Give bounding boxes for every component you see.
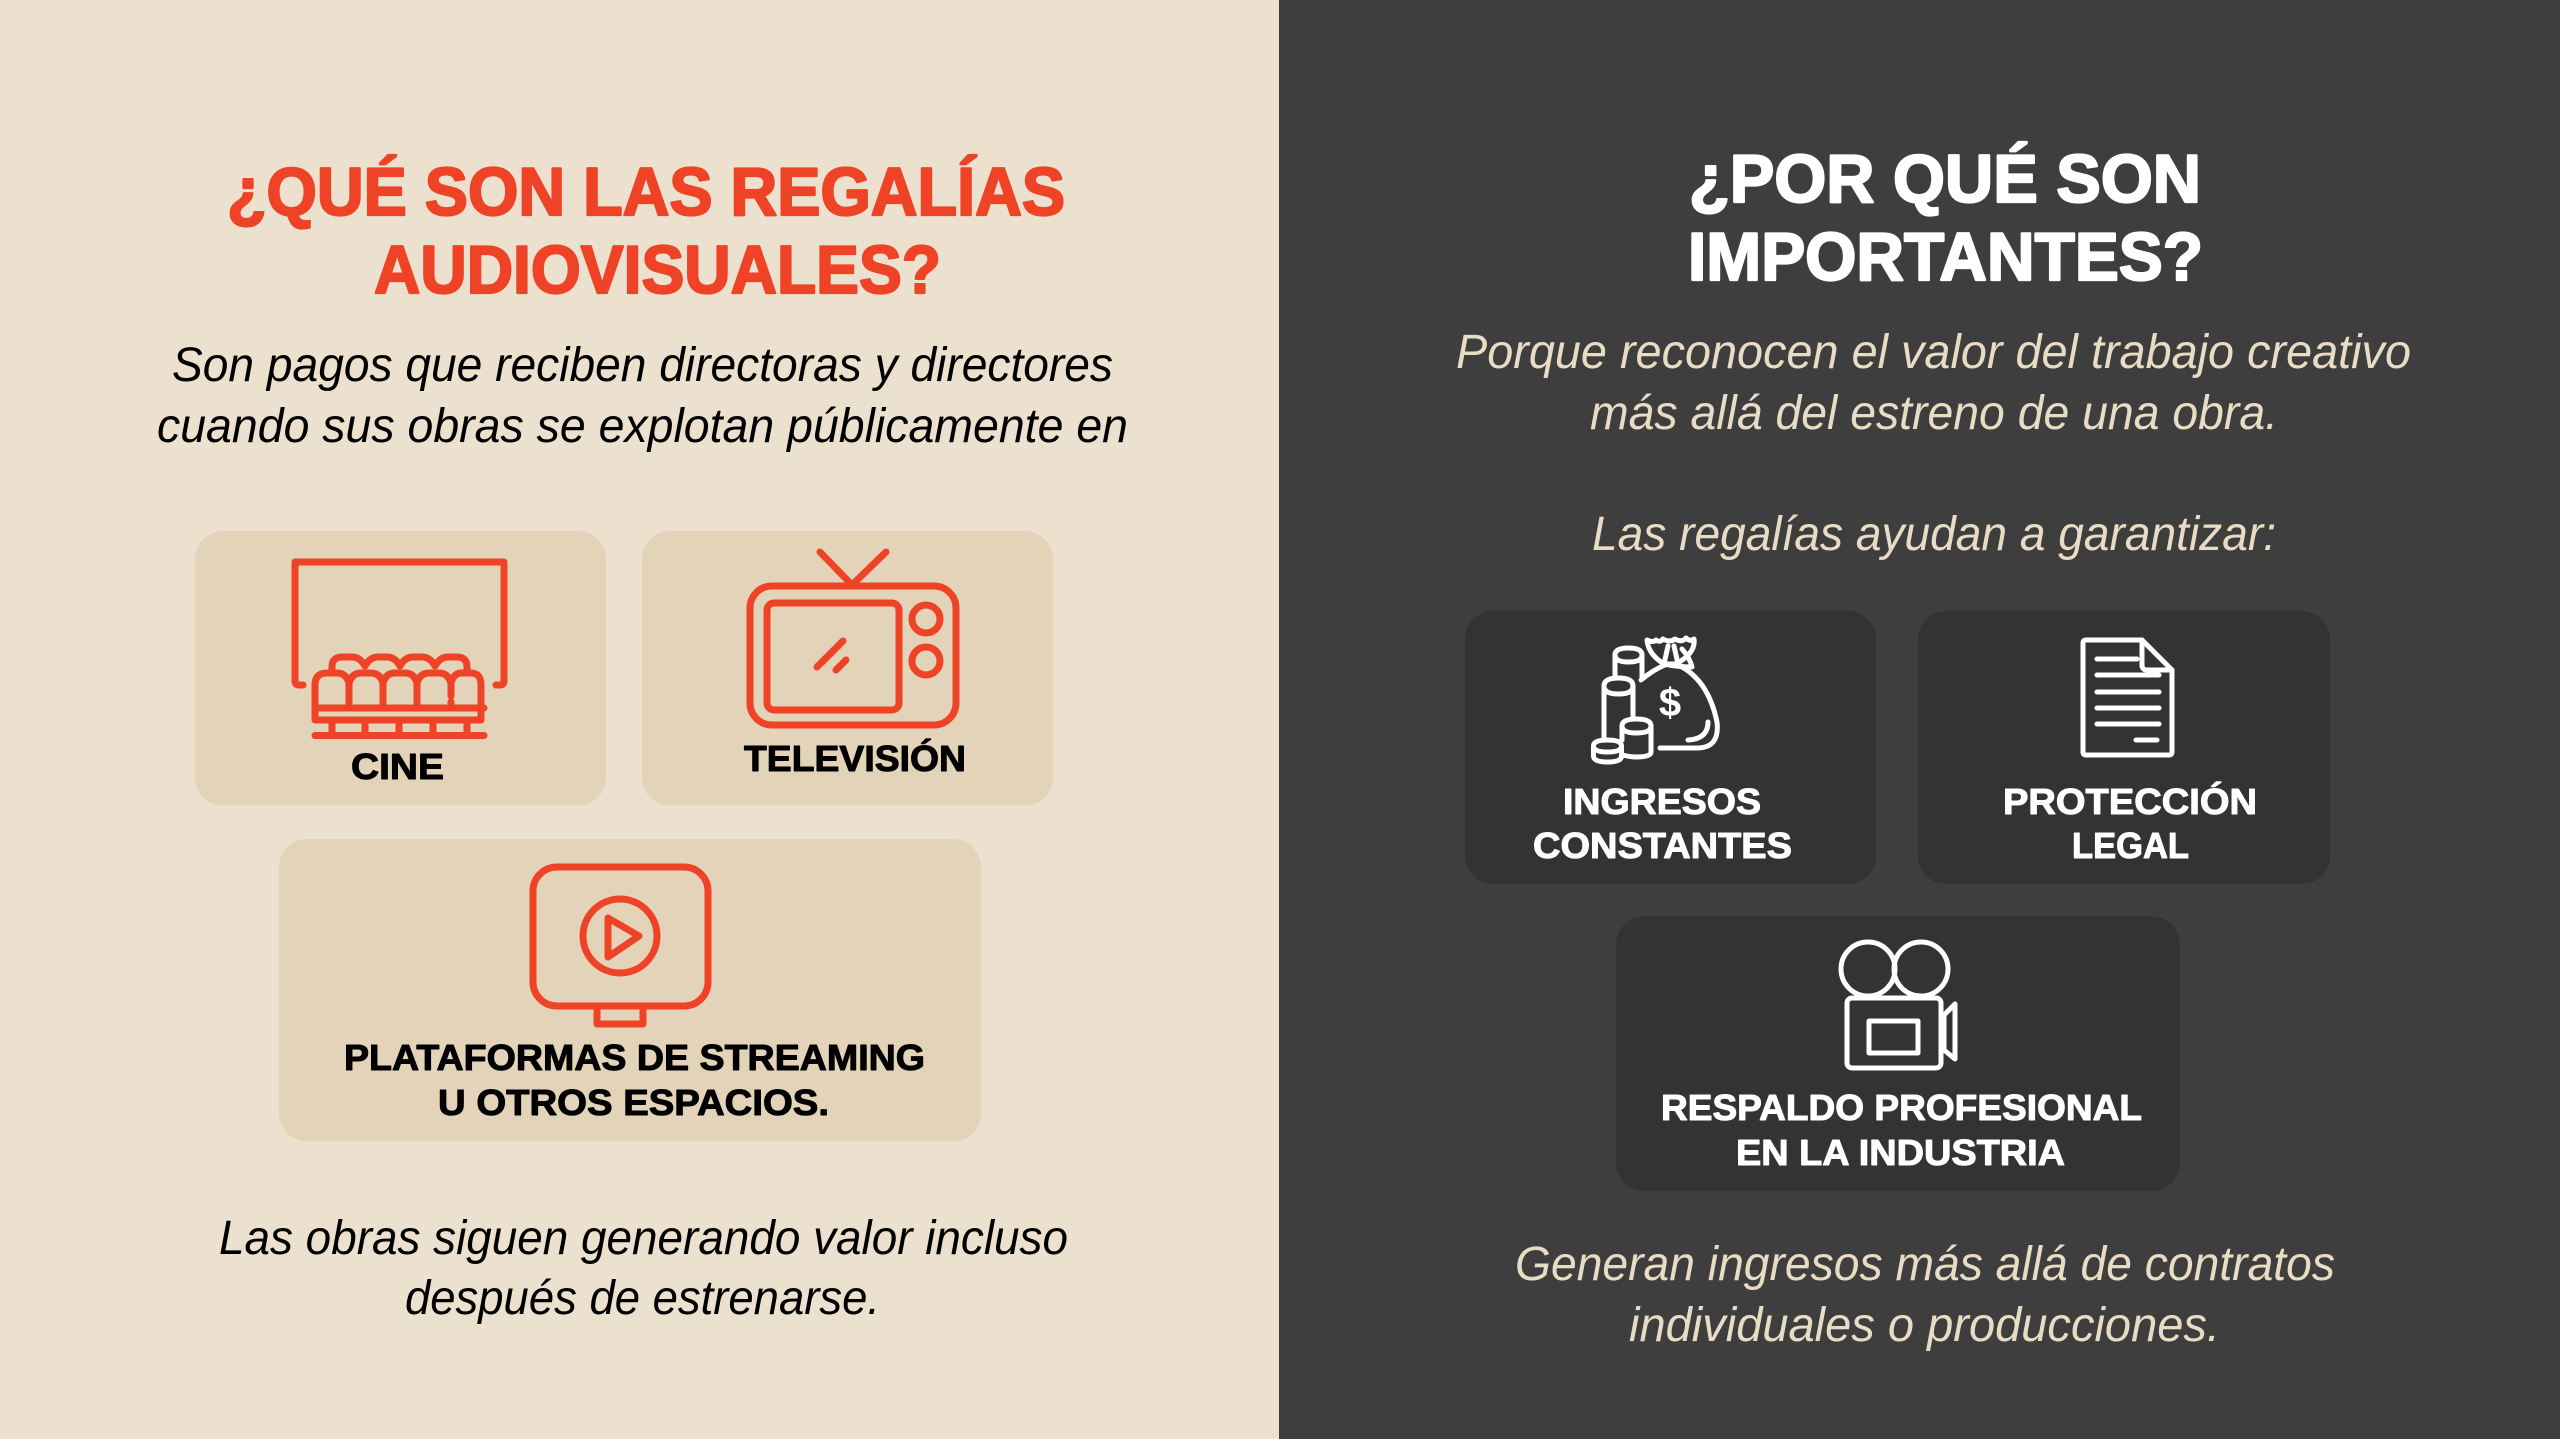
label: streaming: U OTROS ESPACIOS. [438,1082,829,1123]
card: legal protection [1918,611,2330,884]
text block: closing left: después de estrenarse. [405,1272,880,1325]
label: steady income: CONSTANTES [1533,825,1792,866]
icon: streaming screen with play button [533,867,708,1024]
icon glyph: dollar sign: $ [1659,681,1681,725]
card: steady income [1465,611,1876,884]
text block: closing right: individuales o producciones. [1629,1299,2220,1352]
label: professional backing: RESPALDO PROFESIONAL [1661,1087,2142,1128]
label: steady income [1533,781,1792,866]
card: cine [195,531,606,806]
label: steady income: INGRESOS [1563,781,1761,822]
text block: definition: Son pagos que reciben directoras y directores [172,339,1113,392]
icon: film camera [1841,942,1955,1068]
label: legal protection: PROTECCIÓN [2003,780,2257,822]
card: professional backing [1616,916,2180,1191]
text block: definition [157,339,1128,453]
card: streaming [279,839,981,1142]
text block: closing right [1515,1238,2335,1352]
label: cine: CINE [351,746,444,787]
label: streaming [344,1037,925,1123]
text block: closing left [219,1212,1068,1325]
title: right heading [1688,141,2203,295]
title: left heading: ¿QUÉ SON LAS REGALÍAS [227,154,1065,230]
panel: why they matter [1279,0,2560,1439]
label: legal protection [2003,780,2257,866]
label: professional backing: EN LA INDUSTRIA [1736,1132,2065,1173]
text block: definition: cuando sus obras se explotan públicamente en [157,400,1128,453]
label: streaming: PLATAFORMAS DE STREAMING [344,1037,925,1078]
text block: recognition [1456,326,2411,440]
label: television: TELEVISIÓN [744,737,966,779]
icon: document [2083,640,2172,755]
icon: money bag and coins [1594,638,1717,762]
text block: closing right: Generan ingresos más allá de contratos [1515,1238,2335,1291]
text block: guarantee intro: Las regalías ayudan a garantizar: [1592,508,2276,561]
card: television [642,531,1053,806]
title: right heading: IMPORTANTES? [1688,219,2203,295]
label: legal protection: LEGAL [2072,825,2189,866]
text block: closing left: Las obras siguen generando valor incluso [219,1212,1068,1265]
panel: what are royalties [0,0,1280,1439]
title: right heading: ¿POR QUÉ SON [1689,141,2201,217]
text block: recognition: Porque reconocen el valor del trabajo creativo [1456,326,2411,379]
icon: television [750,552,956,725]
icon: cinema screen and seats [295,562,504,736]
label: professional backing [1661,1087,2142,1173]
title: left heading [227,154,1065,308]
title: left heading: AUDIOVISUALES? [374,232,941,308]
text block: recognition: más allá del estreno de una obra. [1590,387,2278,440]
